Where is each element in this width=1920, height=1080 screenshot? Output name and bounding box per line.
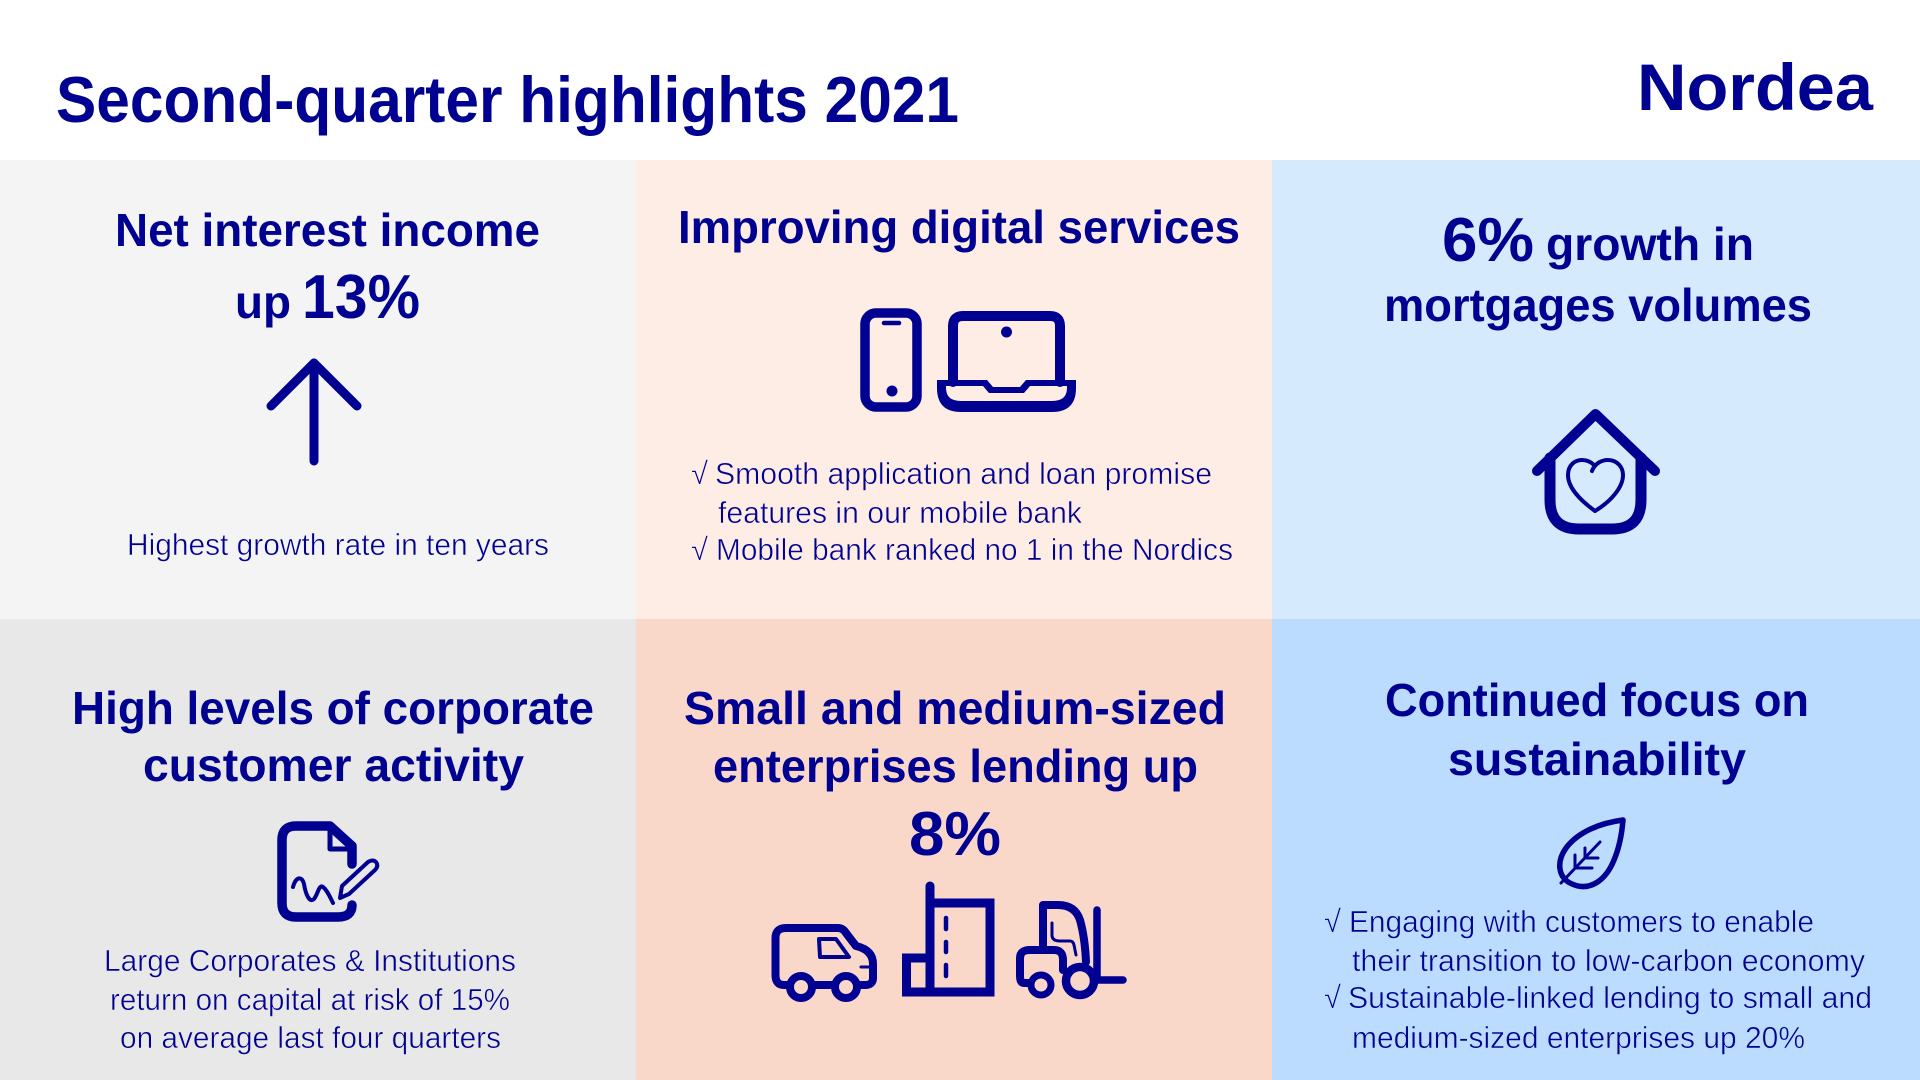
heading: up 13%: up [235,276,291,328]
icon: leaf [1560,820,1623,887]
text: large corporates and institutions [104,943,516,1055]
text: digital services bullets: features in our mobile bank [718,495,1082,530]
icon: house with heart [1537,414,1655,529]
heading: 6% growth in: growth in [1546,218,1754,270]
heading: continued focus on sustainability: Continued focus on [1385,674,1809,726]
heading: net interest income: Net interest income [115,204,540,256]
text: large corporates and institutions: Large Corporates & Institutions [104,943,516,978]
icon: warehouse building [906,886,990,992]
heading: small and medium-sized enterprises lending up: Small and medium-sized [684,682,1226,734]
icon: phone [865,313,917,407]
heading: small and medium-sized enterprises lending up: enterprises lending up [713,740,1198,792]
heading: 6% growth in: 6% [1442,206,1534,275]
text: digital services bullets: Mobile bank ranked no 1 in the Nordics [716,532,1233,567]
text: sustainability bullets: medium-sized enterprises up 20% [1352,1020,1805,1055]
logo: Nordea: Nordea [1637,50,1874,124]
icon: up arrow [271,363,357,461]
text: digital services bullets [691,456,1233,567]
text: large corporates and institutions: on average last four quarters [120,1020,501,1055]
panel: mortgage growth [1272,160,1920,619]
icon: signed document [282,826,377,917]
heading: 6% growth in [1442,206,1754,275]
text: sustainability bullets: √ [1324,980,1341,1015]
icon: laptop [937,316,1076,412]
panel: net interest income [0,160,636,619]
heading: up 13%: 13% [302,263,420,332]
text: digital services bullets: √ [691,456,708,491]
heading: small and medium-sized enterprises lending up [684,682,1226,792]
text: digital services bullets: Smooth application and loan promise [715,456,1212,491]
text: large corporates and institutions: return on capital at risk of 15% [110,982,510,1017]
text: sustainability bullets: their transition to low-carbon economy [1352,943,1865,978]
text: sustainability bullets [1324,904,1872,1055]
heading: mortgages volumes: mortgages volumes [1384,279,1812,331]
text: highest growth rate: Highest growth rate in ten years [127,527,549,562]
heading: high levels of corporate customer activity [72,682,594,791]
heading: 8%: 8% [909,800,1001,869]
panel: corporate customer activity [0,619,636,1080]
text: sustainability bullets: √ [1324,904,1341,939]
heading: high levels of corporate customer activity: High levels of corporate [72,682,594,734]
panel: improving digital services [636,160,1272,619]
heading: high levels of corporate customer activity: customer activity [143,739,524,791]
heading: continued focus on sustainability: sustainability [1448,733,1746,785]
panel: sustainability [1272,619,1920,1080]
text: digital services bullets: √ [691,532,708,567]
heading: continued focus on sustainability [1385,674,1809,785]
icon: van [776,928,873,998]
panel: SME lending [636,619,1272,1080]
text: sustainability bullets: Sustainable-linked lending to small and [1348,980,1872,1015]
icon: forklift [1020,905,1123,995]
text: sustainability bullets: Engaging with customers to enable [1349,904,1814,939]
heading: up 13% [235,263,420,332]
heading: improving digital services: Improving digital services [678,201,1240,253]
title: Second-quarter highlights 2021 [56,63,959,136]
